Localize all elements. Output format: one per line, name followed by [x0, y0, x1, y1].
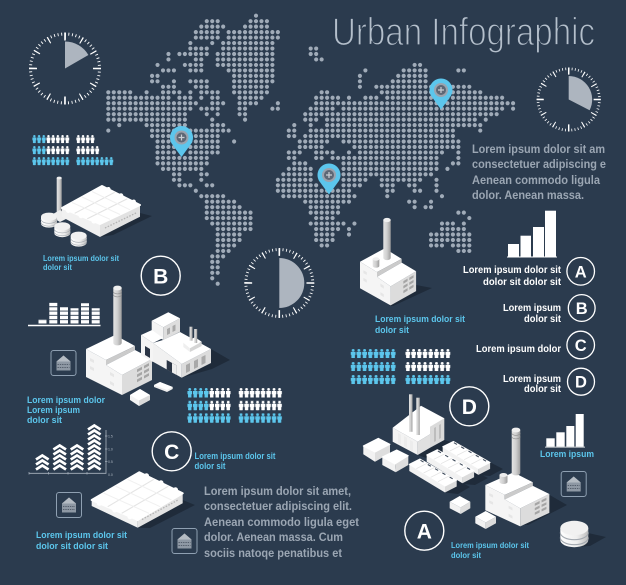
icon: building box lower left: [56, 492, 82, 518]
legend A: [463, 258, 594, 288]
text block: lower paragraph: dolor. Aenean massa. Cum: [204, 530, 343, 544]
label: top center factory caption: dolor sit: [375, 325, 410, 336]
people icons: right group two: [405, 349, 451, 384]
legend D: Lorem ipsum: [503, 374, 561, 385]
long sheds: [409, 441, 503, 494]
legend D: [503, 368, 594, 395]
label: warehouse caption: Lorem ipsum dolor sit: [43, 253, 119, 263]
icon: building box left: [51, 350, 76, 376]
label: warehouse lower caption: [36, 530, 128, 552]
label: factory caption: Lorem ipsum dolor: [27, 395, 105, 406]
people icons: middle group one: [187, 388, 231, 423]
factory: complex with two stacks: [141, 312, 230, 378]
label: badge C caption: dolor sit: [194, 461, 226, 471]
legend A: Lorem ipsum dolor sit: [463, 265, 562, 276]
label: warehouse lower caption: dolor sit dolor sit: [36, 541, 109, 552]
label: badge C caption: Lorem ipsum dolor sit: [194, 451, 276, 461]
legend C: C: [575, 337, 587, 355]
label: badge A caption: [451, 540, 529, 560]
factory: big lower right: [485, 428, 567, 526]
small vault buildings: [363, 438, 408, 472]
text block: lower paragraph: [204, 484, 359, 560]
people icons: right group one: [350, 349, 396, 384]
map: Americas and Greenland: [108, 16, 278, 284]
warehouse: lower left: [92, 472, 195, 528]
people icons: middle group two: [238, 388, 282, 423]
arrow chart: 1.0: [108, 448, 113, 452]
label: warehouse caption: dolor sit: [43, 262, 72, 272]
legend D: dolor sit: [524, 384, 562, 395]
arrow chart: 0.5: [108, 460, 113, 464]
small boxes: [450, 496, 496, 529]
text block: right paragraph: Aenean commodo ligula: [472, 173, 600, 187]
legend A: dolor sit dolor sit: [483, 277, 562, 288]
icon: building box near paragraph: [172, 528, 197, 554]
icon: building box lower right: [561, 472, 586, 496]
arrow chart: [29, 426, 113, 477]
arrow chart: 1.5: [108, 434, 113, 438]
label: badge C caption: [194, 451, 276, 471]
icon: map pin Africa: [318, 164, 340, 194]
text block: right paragraph: consectetuer adipiscing e: [472, 157, 606, 171]
label: badge A caption: Lorem ipsum dolor sit: [451, 540, 529, 550]
clock: top left: [29, 32, 101, 104]
label: factory caption: [27, 395, 105, 426]
icon: map pin North America: [170, 126, 193, 157]
badge C: C: [164, 441, 179, 464]
label: warehouse caption: [43, 253, 119, 272]
label: top center factory caption: Lorem ipsum dolor sit: [375, 314, 466, 325]
bar chart: top right: [507, 211, 557, 258]
label: warehouse lower caption: Lorem ipsum dolor sit: [36, 530, 128, 541]
text block: lower paragraph: Aenean commodo ligula eget: [204, 515, 359, 529]
legend B: dolor sit: [524, 314, 562, 325]
clock: center: [244, 248, 314, 318]
warehouse with chimney and tanks: [41, 177, 152, 247]
badge D: [450, 387, 489, 426]
label: bar chart caption: Lorem ipsum: [540, 449, 594, 460]
people icons: top left group two: [76, 135, 114, 165]
legend D: D: [575, 374, 587, 392]
badge C: [152, 432, 191, 471]
clock: top right: [537, 67, 601, 132]
factory: top center: [360, 218, 432, 306]
icon: map pin Russia: [430, 79, 452, 110]
legend B: Lorem ipsum: [503, 303, 561, 314]
legend C: [476, 331, 594, 359]
legend B: [503, 295, 595, 325]
icon: storage tank: [560, 521, 606, 547]
text block: lower paragraph: consectetuer adipiscing elit.: [204, 499, 352, 513]
people icons: top left group one: [32, 135, 70, 165]
badge B: [141, 256, 180, 295]
legend B: B: [576, 300, 588, 318]
legend C: Lorem ipsum dolor: [476, 344, 561, 355]
label: factory caption: Lorem ipsum: [27, 405, 80, 416]
factory: two stacks lower right: [393, 394, 460, 460]
badge D: D: [462, 396, 477, 419]
text block: right paragraph: dolor. Aenean massa.: [472, 188, 584, 202]
badge A: [405, 511, 444, 550]
text block: lower paragraph: sociis natoqe penatibus et: [204, 546, 342, 560]
label: factory caption: dolor sit: [27, 415, 63, 426]
text block: right paragraph: [472, 142, 606, 202]
text block: lower paragraph: Lorem ipsum dolor sit amet,: [204, 484, 351, 498]
map: Eurasia, Africa and Australia: [278, 49, 513, 251]
dotted world map: [108, 16, 513, 284]
label: top center factory caption: [375, 314, 466, 336]
text block: right paragraph: Lorem ipsum dolor sit am: [472, 142, 605, 156]
badge B: B: [153, 265, 168, 288]
bar chart: lower right: [545, 414, 585, 448]
legend A: A: [575, 263, 587, 281]
arrow chart: 0.0: [108, 473, 113, 477]
badge A: A: [417, 520, 432, 543]
factory: large left with chimney: [86, 286, 173, 406]
segmented bar chart: [28, 303, 100, 326]
label: badge A caption: dolor sit: [451, 550, 481, 560]
